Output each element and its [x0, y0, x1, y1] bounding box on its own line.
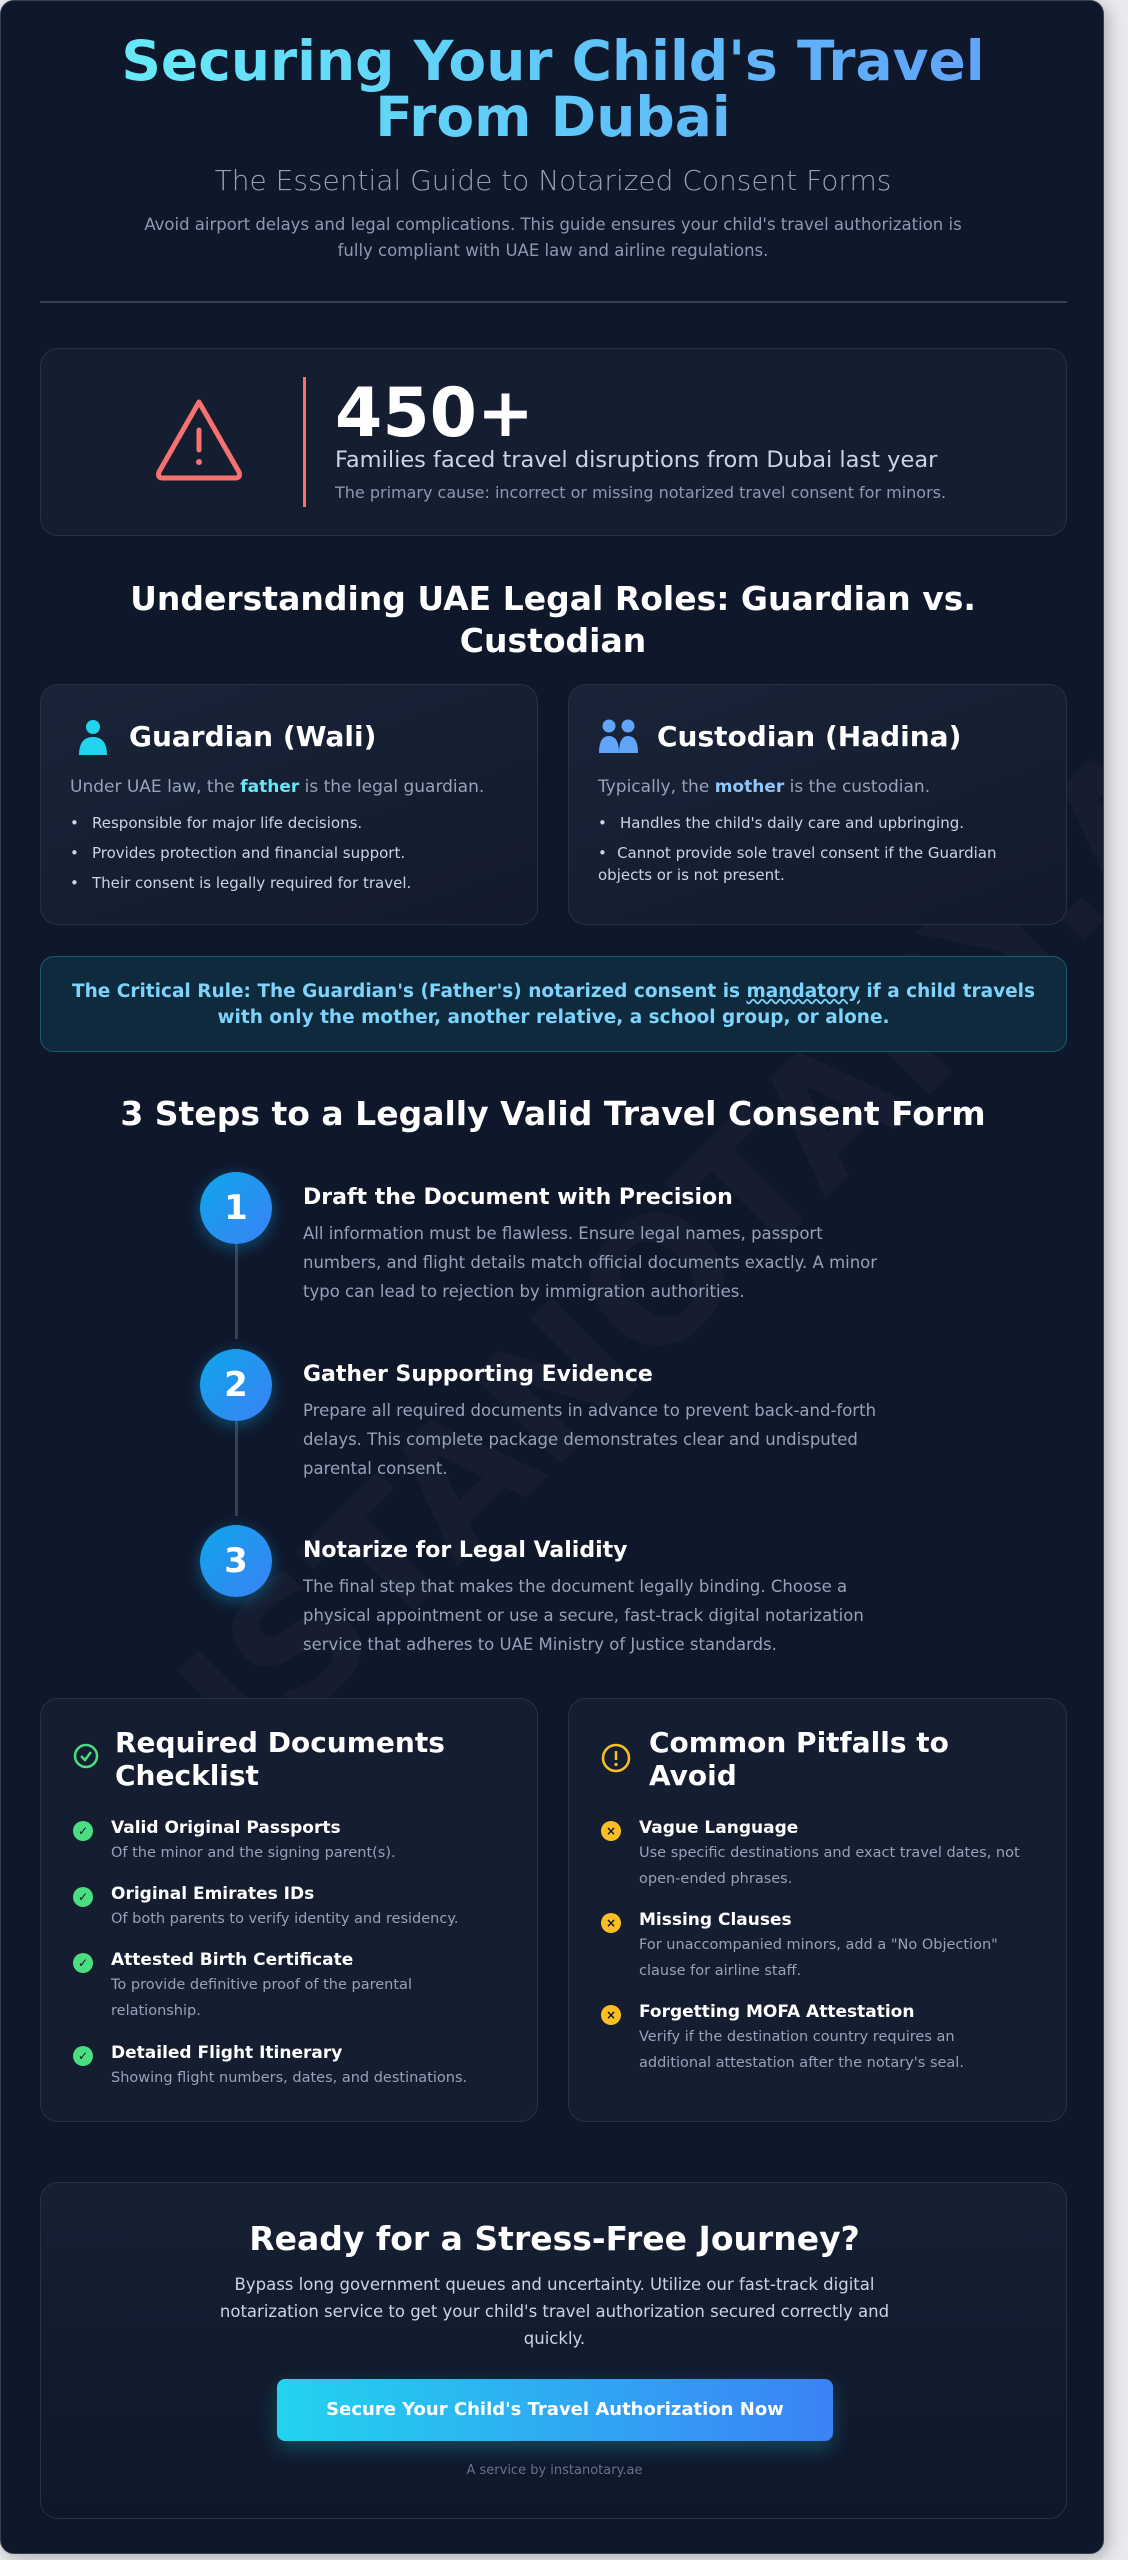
icon: alert circle — [602, 1744, 630, 1772]
heading: legal roles: Custodian — [460, 621, 646, 660]
panel: pitfalls: × — [606, 2008, 616, 2022]
button: Secure Your Child's Travel Authorization Now — [326, 2399, 784, 2420]
steps timeline: Prepare all required documents in advance to prevent back-and-forth delays. This complete package demonstrates clear and undisputed parental consent. — [303, 1401, 876, 1478]
item — [73, 1950, 412, 2019]
heading: legal roles — [130, 579, 976, 660]
item: Of the minor and the signing parent(s). — [111, 1845, 396, 1861]
item: Vague Language — [639, 1818, 798, 1838]
panel: checklist: ✓ — [78, 2049, 88, 2063]
panel: custodian — [568, 684, 1067, 925]
item: Of both parents to verify identity and residency. — [111, 1911, 458, 1927]
panel: pitfalls: Common Pitfalls to Avoid — [649, 1726, 949, 1792]
intro text: Avoid airport delays and legal complications. This guide ensures your child's travel authorization is fully compliant with UAE law and airline regulations. — [144, 215, 962, 260]
panel: custodian: Cannot provide sole travel consent if the Guardian objects or is not present. — [598, 844, 996, 884]
title: Securing Your Child's Travel — [121, 29, 985, 93]
panel: pitfalls: × — [606, 1916, 616, 1930]
item — [601, 2002, 964, 2071]
item: Valid Original Passports — [111, 1818, 341, 1838]
title: From Dubai — [375, 85, 731, 149]
heading: 3 steps: 3 Steps to a Legally Valid Travel Consent Form — [120, 1094, 986, 1133]
panel: custodian: Handles the child's daily care and upbringing. — [620, 814, 964, 832]
panel: CTA — [40, 2182, 1067, 2519]
steps timeline: All information must be flawless. Ensure legal names, passport numbers, and flight details match official documents exactly. A minor typo can lead to rejection by immigration authorities. — [303, 1224, 877, 1301]
item — [73, 1818, 396, 1861]
panel: guardian: Their consent is legally required for travel. — [92, 874, 411, 892]
step 2 — [192, 1344, 876, 1478]
subtitle: The Essential Guide to Notarized Consent Forms — [215, 164, 891, 197]
stat label: Families faced travel disruptions from Dubai last year — [335, 447, 937, 473]
item: Original Emirates IDs — [111, 1884, 314, 1904]
step 3 — [192, 1520, 864, 1654]
title — [1, 33, 1105, 145]
panel: checklist — [40, 1698, 538, 2122]
item: Verify if the destination country requires an additional attestation after the notary's seal. — [639, 2029, 964, 2071]
steps timeline: The final step that makes the document legally binding. Choose a physical appointment or use a secure, fast-track digital notarization service that adheres to UAE Ministry of Justice standards. — [303, 1577, 864, 1654]
item: Forgetting MOFA Attestation — [639, 2002, 914, 2022]
icon: people — [599, 720, 638, 753]
panel: CTA: A service by instanotary.ae — [466, 2463, 643, 2478]
steps timeline: 3 — [224, 1541, 248, 1581]
panel: CTA: Ready for a Stress-Free Journey? — [249, 2219, 860, 2258]
steps timeline: Gather Supporting Evidence — [303, 1362, 653, 1387]
panel: CTA: Bypass long government queues and uncertainty. Utilize our fast-track digital notarization service to get your child's travel authorization secured correctly and quickly. — [220, 2275, 889, 2348]
panel: checklist: ✓ — [78, 1890, 88, 1904]
heading: legal roles: Understanding UAE Legal Roles: Guardian vs. — [130, 579, 976, 618]
panel: checklist: ✓ — [78, 1956, 88, 1970]
item: For unaccompanied minors, add a "No Objection" clause for airline staff. — [639, 1937, 998, 1979]
item: Missing Clauses — [639, 1910, 792, 1930]
item: To provide definitive proof of the parental relationship. — [111, 1977, 412, 2019]
item — [601, 1818, 1020, 1887]
steps timeline: Draft the Document with Precision — [303, 1185, 733, 1210]
item: Showing flight numbers, dates, and destinations. — [111, 2070, 467, 2086]
panel: guardian: Responsible for major life decisions. — [92, 814, 362, 832]
step 1 — [192, 1168, 877, 1301]
stat card — [40, 348, 1067, 536]
panel: pitfalls — [568, 1698, 1067, 2122]
panel: guardian: Guardian (Wali) — [129, 720, 376, 753]
panel: checklist: ✓ — [78, 1824, 88, 1838]
panel: guardian: Provides protection and financial support. — [92, 844, 405, 862]
panel: guardian: Under UAE law, the father is the legal guardian. — [70, 777, 484, 797]
panel: pitfalls: × — [606, 1824, 616, 1838]
callout: critical rule: The Critical Rule: The Guardian's (Father's) notarized consent is mandatory if a child travels with only the mother, another relative, a school group, or alone. — [72, 981, 1035, 1028]
item — [73, 2043, 467, 2086]
panel: custodian: Custodian (Hadina) — [657, 720, 961, 753]
panel: guardian — [40, 684, 538, 925]
icon: warning — [156, 400, 242, 480]
item: Detailed Flight Itinerary — [111, 2043, 342, 2063]
item: Use specific destinations and exact travel dates, not open-ended phrases. — [639, 1845, 1020, 1887]
panel: custodian: Typically, the mother is the custodian. — [598, 777, 930, 797]
steps timeline: Notarize for Legal Validity — [303, 1538, 628, 1563]
item — [73, 1884, 458, 1927]
icon: person — [79, 720, 107, 755]
steps timeline: 1 — [224, 1188, 248, 1228]
steps timeline: 2 — [224, 1365, 248, 1405]
button — [277, 2379, 833, 2441]
stat note: The primary cause: incorrect or missing notarized travel consent for minors. — [335, 483, 946, 502]
stat number: 450+ — [335, 374, 534, 453]
icon: check circle — [74, 1744, 98, 1768]
steps timeline — [192, 1168, 877, 1654]
panel: checklist: Required Documents Checklist — [115, 1726, 445, 1792]
item — [601, 1910, 998, 1979]
item: Attested Birth Certificate — [111, 1950, 353, 1970]
callout: critical rule — [40, 956, 1067, 1052]
